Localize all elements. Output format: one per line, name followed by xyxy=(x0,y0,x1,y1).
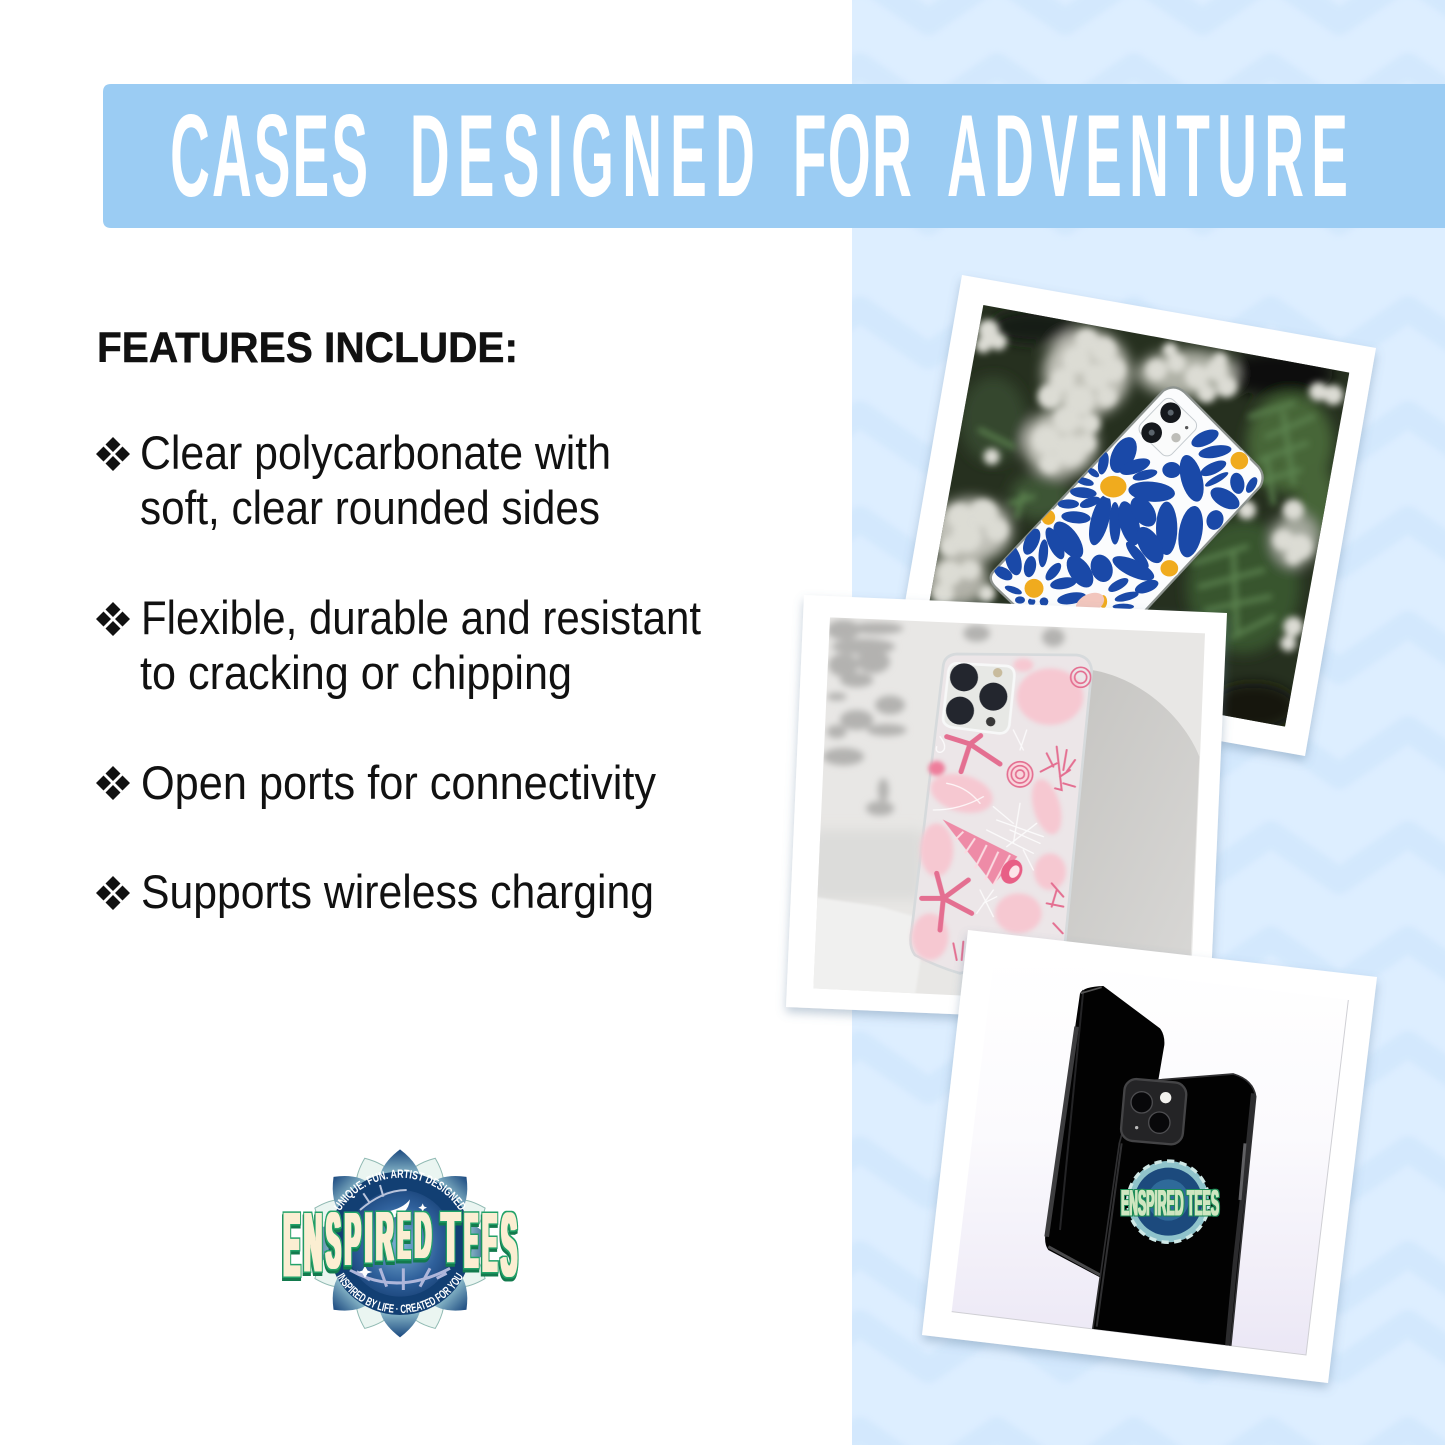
logo petals xyxy=(306,1149,494,1337)
feature: clear polycarbonate: soft, clear rounded sides xyxy=(140,481,600,534)
features list xyxy=(96,324,701,918)
logo wordmark: P xyxy=(345,1197,361,1280)
front phone xyxy=(1093,1074,1256,1347)
phone case: blue daisies xyxy=(991,387,1263,623)
mini logo on case xyxy=(1121,1161,1219,1242)
phone case: seashells xyxy=(911,654,1092,973)
logo wordmark xyxy=(283,1195,517,1296)
logo wordmark: R xyxy=(376,1199,393,1275)
title: ADVENTURE xyxy=(947,91,1348,222)
title xyxy=(170,91,1348,222)
logo badge xyxy=(328,1172,472,1315)
logo ring text: UNIQUE. FUN. ARTIST DESIGNED xyxy=(334,1170,466,1210)
logo wordmark: I xyxy=(365,1199,373,1278)
back phone xyxy=(1045,986,1164,1278)
feature: open ports: Open ports for connectivity xyxy=(141,756,656,809)
logo wordmark: D xyxy=(415,1199,431,1272)
feature: clear polycarbonate: Clear polycarbonate with xyxy=(140,426,611,479)
logo wordmark: E xyxy=(464,1196,478,1285)
features heading: FEATURES INCLUDE: xyxy=(97,324,518,372)
infographic canvas: S xyxy=(501,1195,517,1295)
title: FOR xyxy=(793,91,912,222)
title banner xyxy=(103,84,1445,228)
photo: pink seashell case xyxy=(786,595,1230,1025)
logo wordmark: T xyxy=(441,1199,460,1278)
title: CASES xyxy=(170,91,368,222)
camera island xyxy=(1120,1078,1187,1145)
feature: flexible and durable xyxy=(96,591,701,699)
green foliage xyxy=(980,403,1313,637)
logo wordmark: E xyxy=(283,1195,300,1296)
curved wall shadow xyxy=(1063,670,1199,957)
photo: black cases with logo: ENSPIRED TEES xyxy=(1121,1184,1219,1223)
photo: blue daisy case among white flowers xyxy=(891,275,1376,756)
white blossoms xyxy=(933,319,1343,651)
feature: clear polycarbonate xyxy=(96,426,611,534)
logo wordmark: E xyxy=(398,1200,410,1274)
camera island xyxy=(1138,398,1197,456)
feature: wireless charging: Supports wireless charging xyxy=(141,865,654,918)
logo ring text: INSPIRED BY LIFE · CREATED FOR YOU xyxy=(336,1272,462,1314)
blurred leaf shadows xyxy=(823,620,1065,816)
title: DESIGNED xyxy=(410,91,755,222)
photo: black cases with logo xyxy=(922,930,1377,1383)
conch shell xyxy=(943,819,1027,888)
feature: flexible and durable: to cracking or chipping xyxy=(140,646,572,699)
logo wordmark: S xyxy=(326,1196,341,1285)
logo: Enspired Tees xyxy=(282,1149,519,1338)
feature: flexible and durable: Flexible, durable and resistant xyxy=(141,591,701,644)
camera island xyxy=(943,663,1014,733)
logo wordmark: N xyxy=(304,1196,322,1289)
logo ring text xyxy=(334,1170,466,1314)
panel: chevron background xyxy=(852,0,1445,1445)
logo wordmark: E xyxy=(482,1196,497,1290)
